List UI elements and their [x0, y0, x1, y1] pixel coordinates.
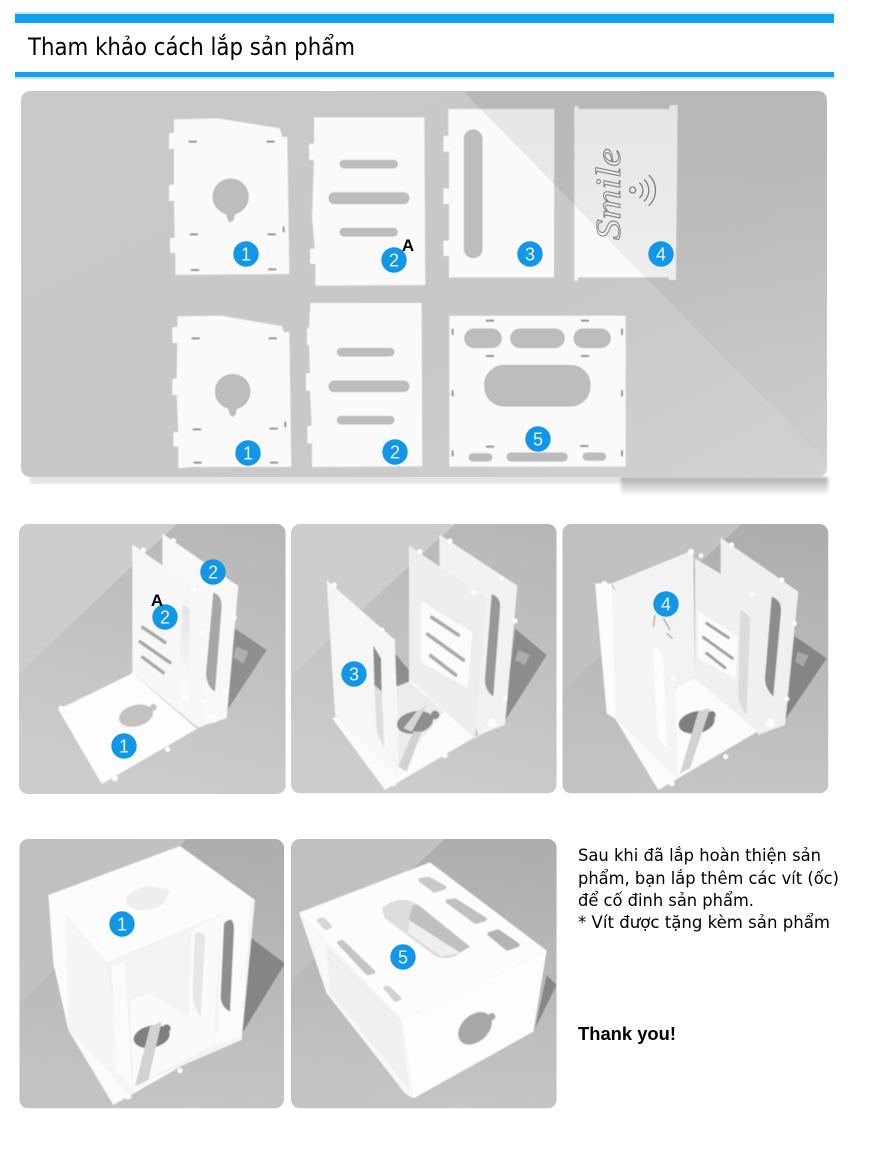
panel: step 3	[562, 524, 828, 793]
label A: A	[402, 236, 414, 255]
panel: flat parts sheet	[21, 91, 828, 496]
diagonal shade over panel	[463, 91, 827, 322]
instruction text block: * Vít được tặng kèm sản phẩm	[578, 913, 830, 932]
illustration: floor and two uprights	[19, 524, 286, 794]
header band: bottom	[15, 72, 834, 79]
illustration: top part 1 closing box	[19, 839, 285, 1108]
badges	[111, 559, 226, 759]
number badges: 1	[241, 244, 251, 264]
instruction text block: để cố đinh sản phẩm.	[578, 891, 754, 910]
part 2 upper	[309, 117, 425, 286]
wifi icon on part 4	[630, 175, 655, 206]
label A: A	[151, 591, 163, 610]
title: Tham khảo cách lắp sản phẩm	[27, 32, 355, 61]
illustration: adding part 4	[562, 524, 828, 793]
number badges: 2	[389, 250, 399, 270]
illustration: adding part 3	[291, 524, 557, 793]
part 1 lower	[172, 316, 291, 468]
panel: step 2	[291, 524, 557, 793]
number badges: 1	[243, 444, 253, 464]
number badges: 2	[390, 442, 400, 462]
header band: top	[15, 12, 834, 23]
number badges	[233, 241, 674, 466]
part 2 lower	[306, 303, 422, 467]
badge: 1	[117, 914, 127, 934]
badge	[390, 944, 416, 970]
instruction text block	[578, 846, 839, 932]
panel: step 4	[19, 839, 285, 1108]
badge	[653, 591, 679, 617]
part 3	[443, 109, 554, 277]
badges: 2	[208, 562, 218, 582]
part 5	[449, 316, 626, 467]
number badges: 5	[533, 430, 543, 450]
instruction text block: Sau khi đã lắp hoàn thiện sản	[578, 846, 821, 865]
instruction text block: phẩm, bạn lắp thêm các vít (ốc)	[578, 869, 839, 888]
badge	[109, 911, 135, 937]
badge	[341, 661, 367, 687]
illustration: assembled box with part 5	[291, 839, 557, 1108]
badges: 1	[119, 736, 129, 756]
panel: step 1	[19, 524, 286, 794]
panel: step 5	[291, 839, 557, 1108]
logo text on part 4: Smile	[589, 148, 628, 240]
part 4 with logo	[574, 105, 678, 281]
badge: 3	[349, 664, 359, 684]
number badges: 3	[525, 244, 535, 264]
badge: 4	[661, 594, 671, 614]
badges: 2	[160, 608, 170, 628]
number badges: 4	[656, 244, 666, 264]
badge: 5	[398, 948, 408, 968]
thank you note: Thank you!	[578, 1024, 676, 1044]
part 1 upper	[169, 118, 289, 275]
